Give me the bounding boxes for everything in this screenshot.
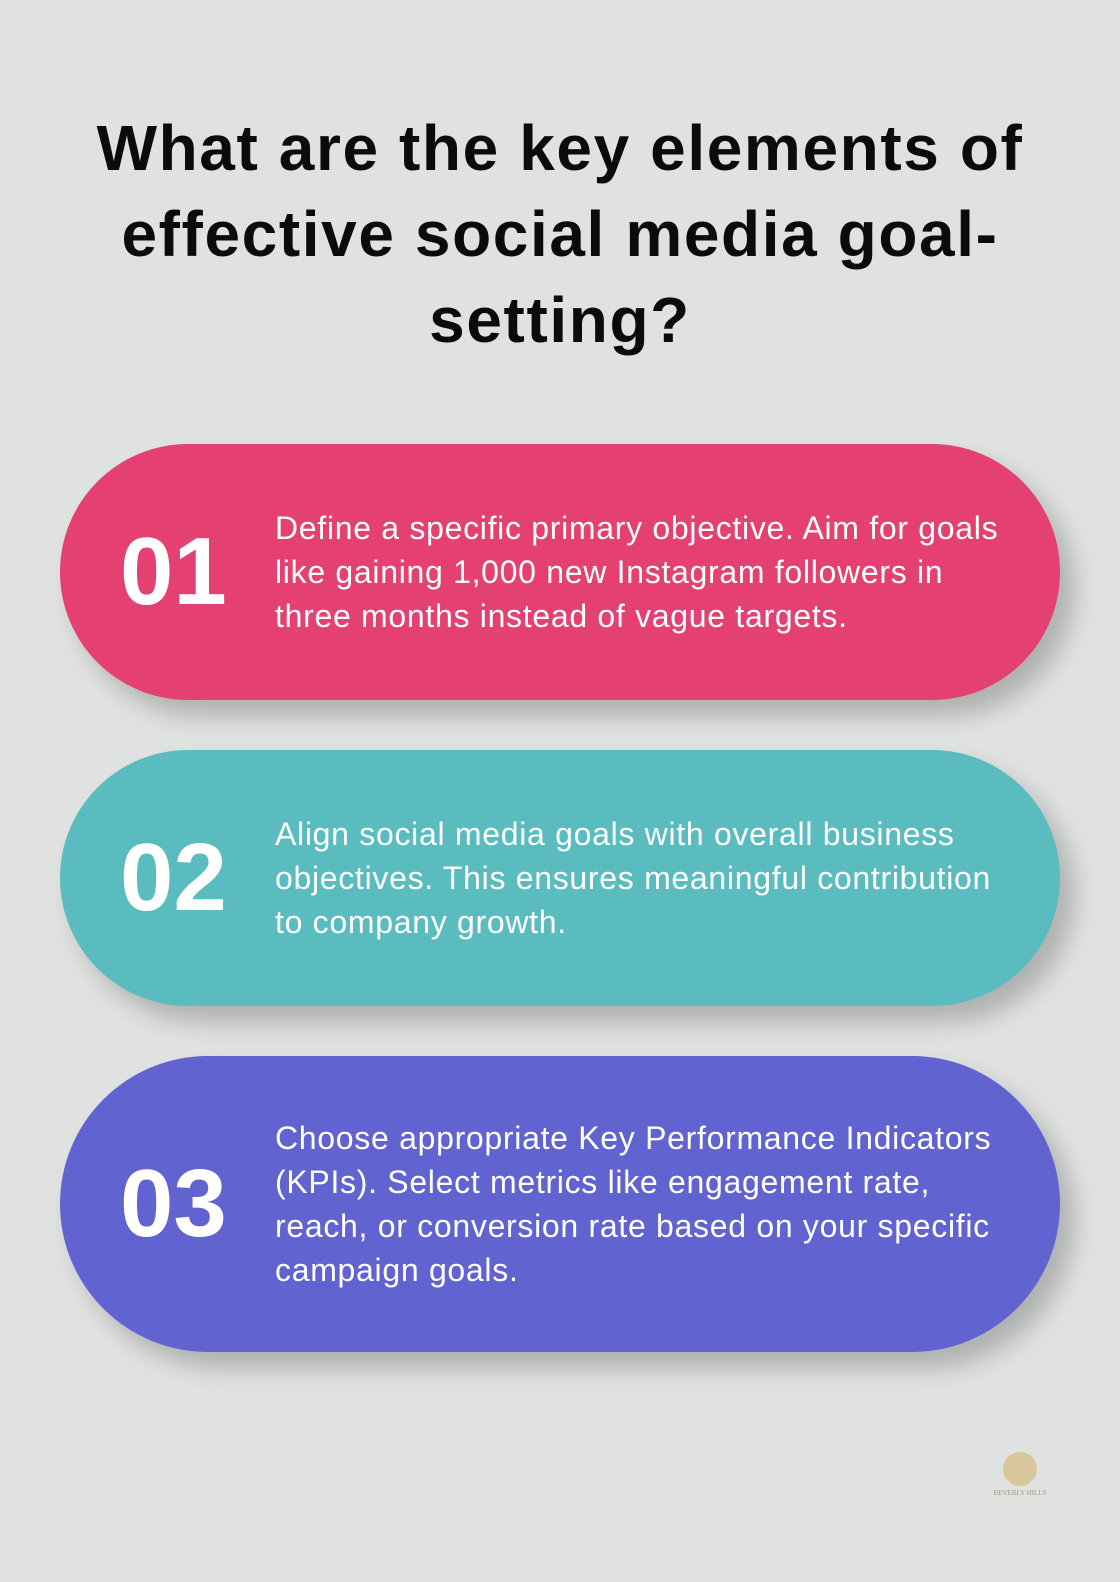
number 03: 03 <box>120 1150 227 1257</box>
logo <box>994 1452 1046 1497</box>
number 02: 02 <box>120 824 227 931</box>
text 03: Choose appropriate Key Performance Indicators (KPIs). Select metrics like engagement rate, reach, or conversion rate based on your specific campaign goals. <box>275 1120 991 1288</box>
panel: step 01 <box>60 444 1060 700</box>
title: What are the key elements of effective social media goal-setting? <box>97 112 1023 356</box>
logo: BEVERLY HILLS <box>994 1489 1046 1497</box>
text 02: Align social media goals with overall business objectives. This ensures meaningful contribution to company growth. <box>275 816 991 940</box>
panel: step 03 <box>60 1056 1060 1352</box>
text 01: Define a specific primary objective. Aim for goals like gaining 1,000 new Instagram followers in three months instead of vague targets. <box>275 510 998 634</box>
panel: step 02 <box>60 750 1060 1006</box>
number 01: 01 <box>120 518 227 625</box>
